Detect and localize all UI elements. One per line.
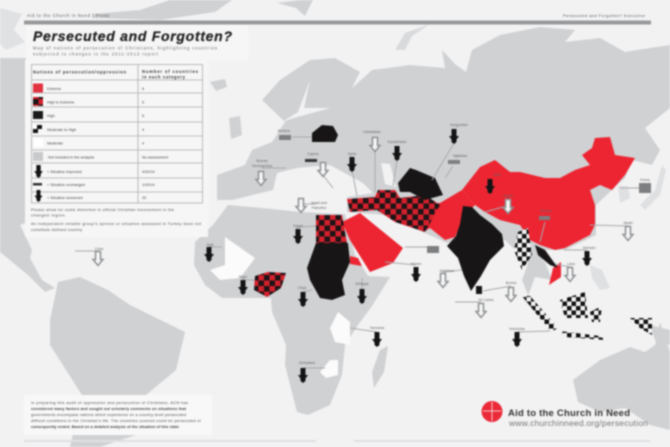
- land: Japan and Korea: [618, 165, 666, 210]
- country labels: Chad: [298, 286, 306, 290]
- country labels: Cyprus: [307, 152, 319, 156]
- country: Belarus: [312, 125, 338, 142]
- country labels: Tibet: [493, 173, 501, 177]
- country: India: [447, 206, 504, 291]
- country: Laos: [535, 245, 558, 268]
- footer rules: [24, 440, 650, 442]
- land: South America: [50, 277, 185, 447]
- header rule: [24, 20, 651, 24]
- markers: situation unchanged: [279, 135, 651, 253]
- country labels: Indonesia: [509, 327, 525, 331]
- logo: Aid to the Church in Need: [482, 401, 502, 422]
- country labels: Zimbabwe: [299, 361, 315, 365]
- country: Saudi Arabia: [342, 213, 403, 272]
- land: Britain: [229, 116, 242, 139]
- legend notes: constitute defined country.: [31, 228, 83, 232]
- legend counts: 20: [142, 196, 146, 200]
- legend labels: Moderate: [47, 142, 63, 146]
- leader lines: [75, 137, 645, 368]
- country labels: Israel and: [311, 201, 327, 205]
- country labels: Kazakhstan: [388, 140, 406, 144]
- country labels: Vietnam: [582, 246, 596, 250]
- country labels: [95, 123, 650, 365]
- country labels: Herzegovina: [252, 164, 272, 168]
- legend labels: = Situation worsened: [47, 196, 83, 200]
- land: North America: [0, 58, 55, 292]
- methodology text box: In preparing this audit of oppression and persecution of Christians, ACN has: [31, 400, 188, 405]
- header strip: [24, 13, 651, 24]
- legend counts: 4/20/14: [142, 170, 155, 174]
- land: Malaysia and Thailand: [522, 258, 552, 305]
- map: moderate countries in white: [210, 237, 350, 378]
- land: Africa: [194, 205, 390, 415]
- land: Novaya Zemlya: [395, 24, 430, 50]
- legend notes: Please allow for some distortion in official Christian involvement in the: [31, 208, 174, 212]
- title panel: [26, 25, 248, 60]
- header left text: Aid to the Church in Need | Press: [27, 13, 109, 18]
- country labels: Palestine: [312, 206, 326, 210]
- legend counts: No assessment: [142, 156, 169, 160]
- land: Greenland and Arctic islands: [93, 0, 232, 20]
- legend counts: 4: [142, 128, 144, 132]
- country: Borneo: [560, 292, 588, 318]
- land: Eurasia: [217, 27, 670, 275]
- country: Egypt: [316, 215, 347, 243]
- country labels: Sri Lanka: [478, 298, 494, 302]
- legend header: [33, 69, 199, 80]
- country: Tanzania: [330, 312, 350, 345]
- country labels: Laos: [567, 262, 575, 266]
- legend counts: 6: [142, 114, 144, 118]
- country: Sri Lanka: [476, 286, 482, 294]
- legend counts: 1/20/14: [142, 183, 155, 187]
- legend counts: 4: [142, 142, 144, 146]
- country: Myanmar: [514, 228, 532, 270]
- methodology text box: [24, 395, 212, 435]
- legend header: Number of countries: [142, 69, 199, 74]
- land: Madagascar: [372, 346, 388, 388]
- country labels: Nepal: [503, 194, 513, 198]
- methodology text box: governments encompass nations which experience on a country-level persecuted: [31, 412, 186, 417]
- legend panel: [25, 60, 208, 237]
- country: Zimbabwe: [320, 360, 338, 378]
- country labels: Syria: [348, 152, 356, 156]
- land: Australia: [573, 322, 670, 430]
- country labels: Bosnia: [256, 159, 268, 163]
- country: Sumatra: [522, 296, 558, 332]
- legend notes: [31, 208, 202, 232]
- country labels: Maldives: [440, 269, 454, 273]
- legend notes: An independent reliable group's opinion or situation assessed in Turkey does not: [31, 222, 202, 226]
- subtitle: subjected to changes in the 2011-2013 report: [33, 52, 159, 56]
- country: Iran east, Afghanistan and Pakistan: [422, 190, 475, 240]
- arrows: situation improved: [93, 138, 633, 318]
- legend labels: [47, 87, 94, 200]
- legend labels: = Situation improved: [47, 170, 82, 174]
- map: moderate to high countries: [514, 228, 652, 340]
- country: Sudan: [307, 243, 350, 300]
- country: Papua and Moluccas: [630, 318, 652, 335]
- header right text: Persecuted and Forgotten? Executive: [563, 13, 646, 18]
- title: Persecuted and Forgotten?: [33, 28, 232, 44]
- methodology text box: considered many factors and sought out scholarly comments on situations that: [31, 406, 187, 411]
- country: Vietnam: [549, 262, 561, 285]
- country labels: Yemen: [410, 262, 422, 266]
- methodology text box: consequently ended. Based on a detailed analysis of the situation of this state: [31, 424, 180, 429]
- country labels: Cuba: [95, 247, 103, 251]
- country labels: Burma: [506, 281, 516, 285]
- country: Nigeria: [254, 272, 286, 297]
- country labels: Niger: [239, 275, 248, 279]
- land: Philippines: [590, 265, 610, 290]
- country: Sulawesi: [590, 306, 602, 322]
- methodology text box: difficult conditions in the Christian's life. The countries covered could be persecuted or: [31, 418, 202, 423]
- legend swatches: [33, 84, 43, 202]
- country labels: Belarus: [278, 129, 290, 133]
- sea: Caspian: [381, 163, 396, 187]
- legend table grid: [32, 64, 202, 203]
- organisation name: Aid to the Church in Need: [508, 408, 630, 419]
- country: Turkey, Iraq and Iran band: [347, 190, 440, 232]
- legend header: in each category: [142, 74, 186, 80]
- legend counts: [142, 87, 169, 200]
- legend counts: 6: [142, 87, 144, 91]
- country: Java and lesser islands: [560, 331, 605, 340]
- country labels: Tanzania: [370, 326, 384, 330]
- country: China: [462, 137, 635, 250]
- legend labels: Not included in the analysis: [48, 156, 94, 160]
- legend notes: changed region.: [31, 214, 66, 218]
- map: high to extreme countries: [254, 190, 440, 297]
- organisation URL: www.churchinneed.org/persecution: [508, 418, 648, 428]
- land: Svalbard: [277, 0, 313, 16]
- legend labels: Extreme: [47, 87, 61, 91]
- country labels: Uzbekistan: [363, 130, 381, 134]
- map: high countries in black: [307, 125, 558, 300]
- land: Iceland: [210, 79, 227, 91]
- country: Eritrea: [350, 256, 362, 266]
- country labels: Kyrgyzstan: [450, 123, 468, 127]
- sea: Mediterranean and Black Sea: [228, 165, 373, 213]
- legend labels: = Situation unchanged: [47, 183, 85, 187]
- legend counts: 5: [142, 100, 144, 104]
- country labels: Tajikistan: [453, 154, 467, 158]
- country labels: Japan: [623, 221, 633, 225]
- country: Central Asia: [398, 168, 443, 200]
- arrows: situation worsened: [204, 129, 592, 383]
- country labels: Ethiopia: [356, 282, 368, 286]
- country labels: Korea: [640, 178, 650, 182]
- legend labels: High to Extreme: [47, 100, 74, 104]
- country labels: Mali: [207, 243, 213, 247]
- legend labels: Moderate to High: [47, 128, 76, 132]
- subtitle: Map of nations of persecution of Christians, highlighting countries: [33, 46, 217, 50]
- legend labels: High: [47, 114, 55, 118]
- country: Mali and Mauritania: [210, 237, 255, 280]
- land: New Guinea: [650, 325, 670, 345]
- legend header: Nations of persecution/oppression: [33, 70, 126, 74]
- land: Arctic Canada: [0, 8, 25, 50]
- map: extreme countries in red: [342, 137, 635, 285]
- sea: Baltic: [282, 80, 330, 122]
- country labels: Egypt: [293, 224, 303, 228]
- country labels: Bhutan: [540, 209, 552, 213]
